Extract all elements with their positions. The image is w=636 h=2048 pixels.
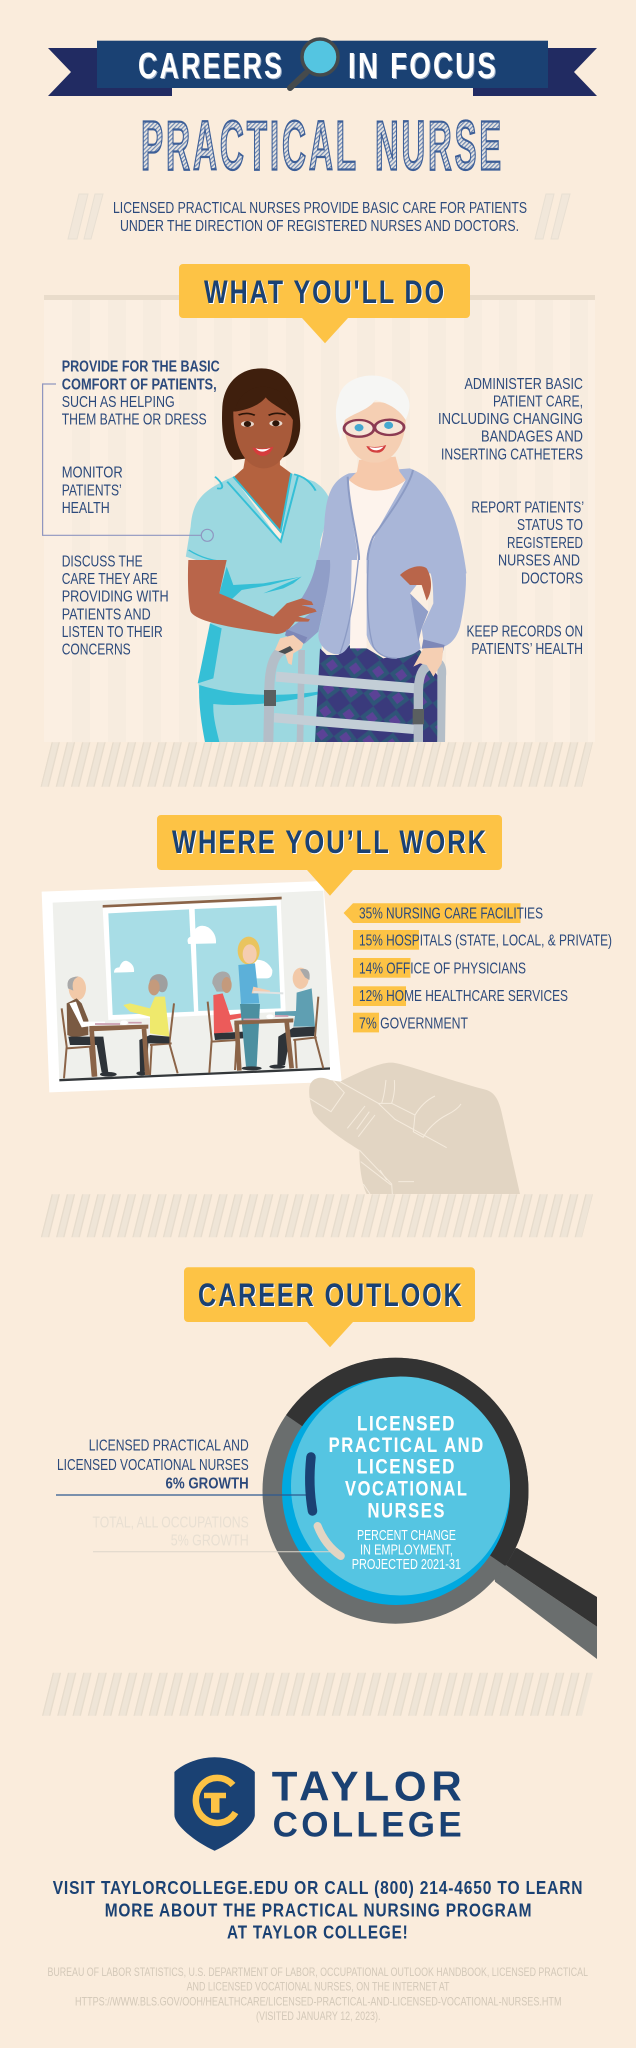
bar: 14% office of physicians — [353, 958, 526, 978]
callout: where you'll work — [157, 815, 502, 896]
duties left: discuss — [62, 554, 169, 659]
heading: careers in focus — [138, 45, 498, 86]
call to action: MORE ABOUT THE PRACTICAL NURSING PROGRAM — [105, 1899, 532, 1920]
bar: 12% home healthcare services: 12% HOME HEALTHCARE SERVICES — [359, 988, 568, 1005]
lens text — [329, 1412, 485, 1523]
duties right: administer: ADMINISTER BASIC — [464, 376, 583, 393]
lens text: LICENSED — [357, 1456, 456, 1479]
lens text: PRACTICAL AND — [329, 1434, 485, 1457]
lens subtext: IN EMPLOYMENT, — [360, 1542, 453, 1558]
source citation: (VISITED JANUARY 12, 2023). — [256, 2009, 380, 2023]
duties left: monitor: PATIENTS’ — [62, 482, 122, 499]
source citation: AND LICENSED VOCATIONAL NURSES, ON THE INTERNET AT — [187, 1979, 450, 1993]
divider hatch 2 — [40, 1194, 593, 1237]
duties right: report — [471, 500, 584, 587]
decorative slashes right — [535, 194, 570, 239]
lens subtext — [352, 1528, 461, 1573]
growth bar: nurses 6%: LICENSED VOCATIONAL NURSES — [57, 1457, 249, 1474]
divider hatch 3 — [42, 1673, 593, 1716]
duties right: report: DOCTORS — [521, 570, 583, 587]
striped wall backdrop — [44, 295, 595, 742]
duties left: monitor: HEALTH — [62, 500, 110, 517]
callout: where you'll work: WHERE YOU’LL WORK — [172, 824, 488, 860]
call to action — [53, 1877, 583, 1943]
intro text: UNDER THE DIRECTION OF REGISTERED NURSES AND DOCTORS. — [120, 218, 519, 235]
source citation — [48, 1965, 588, 2023]
bar: 12% home healthcare services — [353, 986, 568, 1006]
left table and diners — [62, 974, 178, 1078]
heading: careers in focus: IN FOCUS — [348, 45, 498, 86]
growth bar: nurses 6% — [56, 1438, 312, 1511]
window — [103, 897, 286, 1020]
callout: what you'll do — [179, 264, 470, 343]
intro text — [113, 200, 527, 235]
duties right: report: REPORT PATIENTS’ — [471, 500, 584, 517]
photo of care facility dining room — [42, 881, 342, 1092]
logo: taylor college — [174, 1757, 462, 1851]
duties right: report: REGISTERED — [507, 535, 583, 552]
duties right: records: KEEP RECORDS ON — [466, 623, 583, 640]
duties right: administer — [438, 376, 583, 463]
lower bodies and walker — [188, 560, 466, 742]
duties left: monitor: MONITOR — [62, 465, 123, 482]
growth bar: nurses 6%: 6% GROWTH — [166, 1476, 249, 1493]
duties left: discuss: CARE THEY ARE — [62, 571, 158, 588]
duties left: discuss: PATIENTS AND — [62, 606, 151, 623]
logo: taylor college: COLLEGE — [273, 1806, 462, 1845]
upper bodies — [186, 368, 467, 573]
duties left: comfort: THEM BATHE OR DRESS — [62, 412, 207, 429]
bar: 7% government: 7% GOVERNMENT — [359, 1015, 468, 1032]
lens text: VOCATIONAL — [345, 1478, 468, 1501]
logo: taylor college: TAYLOR — [272, 1763, 462, 1810]
duties left: discuss: CONCERNS — [62, 642, 131, 659]
duties left: discuss: LISTEN TO THEIR — [62, 624, 163, 641]
duties right: administer: INCLUDING CHANGING — [438, 411, 583, 428]
icon: shield — [174, 1757, 255, 1851]
duties right: administer: PATIENT CARE, — [493, 393, 583, 410]
heading: careers in focus: CAREERS — [138, 45, 284, 86]
bar: 35% nursing care facilities — [344, 903, 543, 923]
list: work settings — [344, 903, 612, 1032]
duties left: comfort: PROVIDE FOR THE BASIC — [62, 359, 220, 376]
title: practical nurse: PRACTICAL — [141, 106, 359, 184]
growth bar: nurses 6%: LICENSED PRACTICAL AND — [89, 1438, 249, 1455]
callout: what you'll do: WHAT YOU'LL DO — [204, 274, 446, 310]
duties right: administer: BANDAGES AND — [481, 429, 583, 446]
duties left: discuss: PROVIDING WITH — [62, 589, 169, 606]
duties right: records: PATIENTS’ HEALTH — [471, 641, 583, 658]
duties left: monitor — [62, 465, 123, 517]
bar: 14% office of physicians: 14% OFFICE OF PHYSICIANS — [359, 960, 526, 977]
duties left: comfort — [62, 359, 220, 429]
lens text: LICENSED — [357, 1412, 456, 1435]
icon: small magnifying glass — [290, 39, 338, 88]
lens subtext: PERCENT CHANGE — [357, 1528, 456, 1544]
duties left: comfort: SUCH AS HELPING — [62, 394, 175, 411]
growth bar: all occupations 5%: TOTAL, ALL OCCUPATIONS — [92, 1514, 249, 1531]
duties right: administer: INSERTING CATHETERS — [441, 446, 583, 463]
divider hatch 1 — [40, 742, 593, 787]
bar: 35% nursing care facilities: 35% NURSING CARE FACILITIES — [359, 906, 543, 923]
duties right: report: STATUS TO — [517, 517, 583, 534]
callout: career outlook — [184, 1267, 475, 1347]
callout: career outlook: CAREER OUTLOOK — [198, 1277, 464, 1313]
decorative slashes left — [68, 194, 103, 239]
bar: 7% government — [353, 1013, 468, 1032]
illustration: nurse and patient with walker — [186, 368, 467, 742]
right table and diners — [208, 937, 323, 1073]
duties right: records — [466, 623, 583, 658]
duties left: comfort: COMFORT OF PATIENTS, — [62, 376, 217, 393]
duties left: discuss: DISCUSS THE — [62, 554, 143, 571]
connector line and marker — [43, 384, 213, 541]
call to action: AT TAYLOR COLLEGE! — [227, 1922, 408, 1943]
header ribbon — [48, 41, 597, 96]
lens subtext: PROJECTED 2021-31 — [352, 1557, 461, 1573]
duties right: report: NURSES AND — [498, 553, 580, 570]
hand holding the photo — [309, 1063, 520, 1194]
growth bar: all occupations 5%: 5% GROWTH — [171, 1532, 249, 1549]
growth bar: all occupations 5% — [92, 1514, 341, 1556]
lens text: NURSES — [368, 1500, 446, 1523]
large magnifying glass — [262, 1358, 597, 1659]
